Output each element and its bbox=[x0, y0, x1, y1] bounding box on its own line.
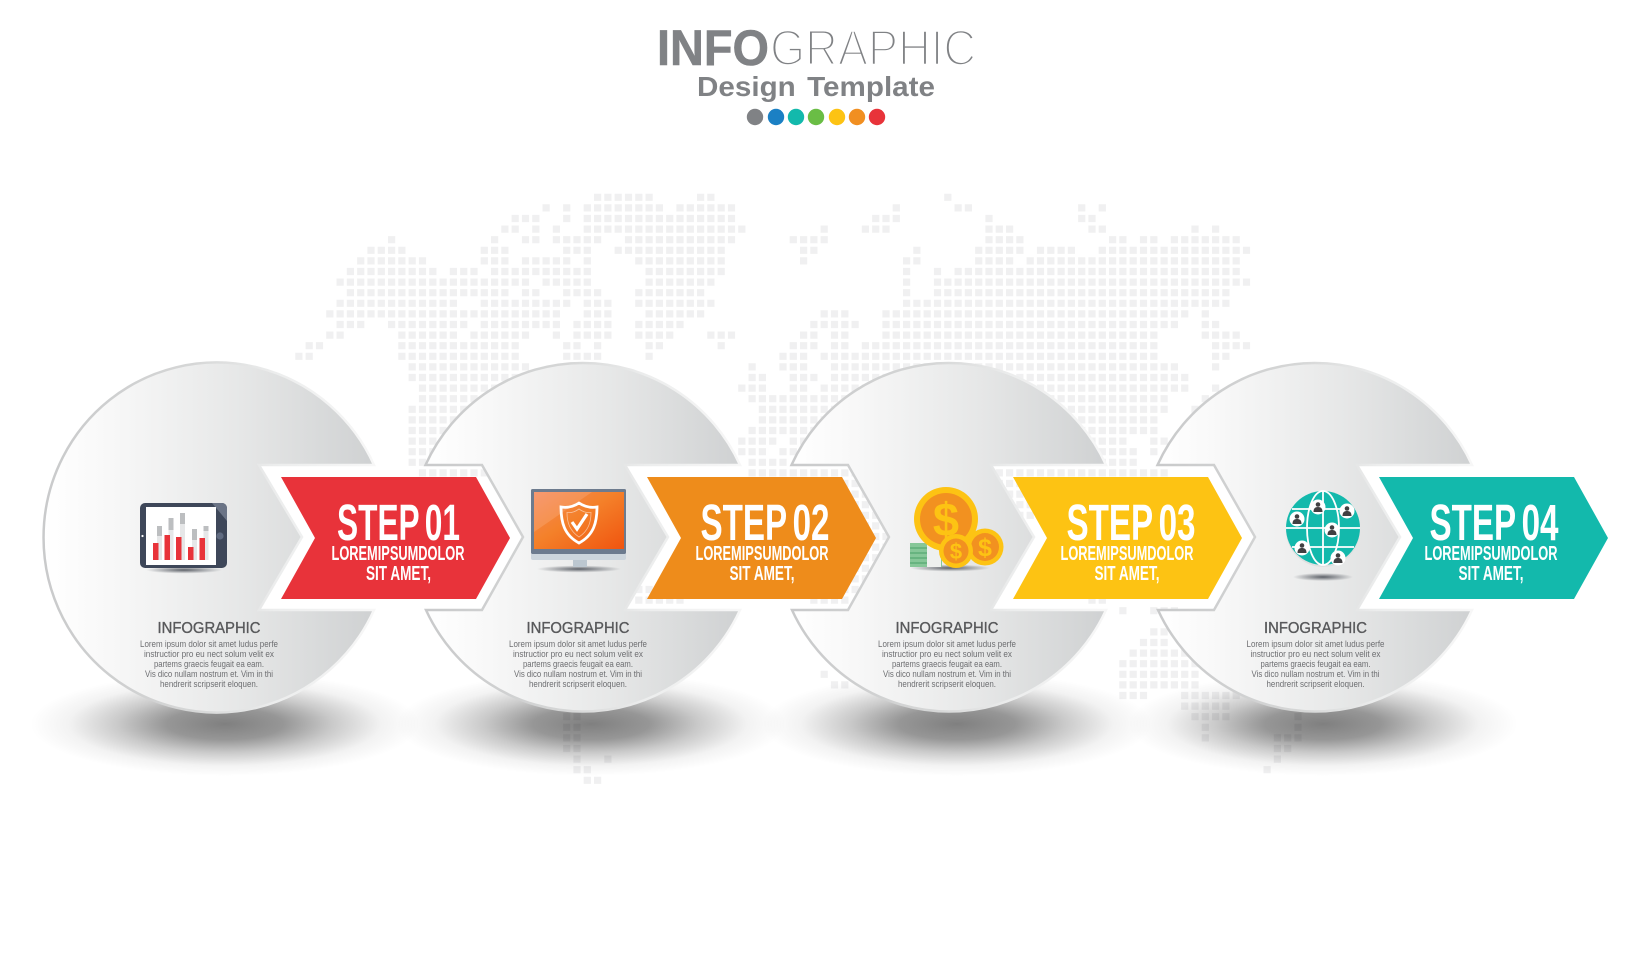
description 03: hendrerit scripserit eloquen. bbox=[898, 679, 996, 689]
description 02 bbox=[509, 620, 647, 689]
arrow: step 03: STEP 03 bbox=[1066, 494, 1196, 551]
description 01: hendrerit scripserit eloquen. bbox=[160, 679, 258, 689]
disc 03 bbox=[792, 363, 1106, 711]
dotted world map bbox=[295, 197, 1302, 780]
icon: tablet bar chart bbox=[140, 503, 227, 574]
floor shadow 03 bbox=[762, 672, 1152, 776]
description 04: INFOGRAPHIC bbox=[1264, 620, 1367, 637]
arrow: step 04 bbox=[1379, 477, 1608, 599]
description 04: instructior pro eu nect solum velit ex bbox=[1250, 649, 1381, 659]
description 03 bbox=[878, 620, 1016, 689]
description 01: instructior pro eu nect solum velit ex bbox=[144, 649, 274, 659]
description 03: instructior pro eu nect solum velit ex bbox=[882, 649, 1012, 659]
arrow: step 01: LOREMIPSUMDOLOR bbox=[332, 543, 465, 565]
arrow: step 04: SIT AMET, bbox=[1458, 563, 1524, 585]
arrow: step 04: STEP 04 bbox=[1430, 494, 1559, 551]
description 01 bbox=[140, 620, 278, 689]
icon: gold coins and cash: $ bbox=[978, 534, 992, 562]
floor shadow 01 bbox=[30, 672, 420, 776]
panel: step 02 bbox=[396, 363, 876, 776]
description 04: Lorem ipsum dolor sit amet ludus perfe bbox=[1246, 639, 1384, 649]
description 04 bbox=[1246, 620, 1384, 689]
arrow: step 01: SIT AMET, bbox=[366, 563, 431, 585]
description 02: instructior pro eu nect solum velit ex bbox=[513, 649, 643, 659]
description 04: Vis dico nullam nostrum et. Vim in thi bbox=[1252, 669, 1380, 679]
panel: step 03 bbox=[762, 363, 1242, 776]
arrow: step 02: SIT AMET, bbox=[730, 563, 794, 585]
floor shadow 02 bbox=[396, 672, 786, 776]
floor shadow 04 bbox=[1128, 672, 1518, 776]
description 02: partems graecis feugait ea eam. bbox=[523, 659, 633, 669]
icon: gold coins and cash: $ bbox=[950, 539, 962, 564]
arrow: step 01: STEP 01 bbox=[337, 494, 460, 551]
arrow: step 02: LOREMIPSUMDOLOR bbox=[696, 543, 829, 565]
icon: monitor with shield bbox=[531, 489, 626, 572]
arrow: step 02 bbox=[647, 477, 876, 599]
description 03: INFOGRAPHIC bbox=[896, 620, 998, 637]
panel: step 01 bbox=[30, 362, 510, 776]
description 04: partems graecis feugait ea eam. bbox=[1260, 659, 1370, 669]
description 01: partems graecis feugait ea eam. bbox=[154, 659, 264, 669]
disc 02 bbox=[426, 363, 740, 711]
arrow: step 02: STEP 02 bbox=[700, 494, 830, 551]
subtitle: Design Template bbox=[697, 71, 935, 102]
description 03: partems graecis feugait ea eam. bbox=[892, 659, 1002, 669]
title word: INFOGRAPHIC: INFO bbox=[657, 20, 769, 76]
panel: step 04 bbox=[1128, 363, 1608, 776]
colour dots bbox=[747, 109, 885, 125]
disc 04 bbox=[1158, 363, 1472, 711]
description 03: Vis dico nullam nostrum et. Vim in thi bbox=[883, 669, 1011, 679]
description 02: Lorem ipsum dolor sit amet ludus perfe bbox=[509, 639, 647, 649]
description 04: hendrerit scripserit eloquen. bbox=[1266, 679, 1364, 689]
title word: INFOGRAPHIC bbox=[657, 20, 976, 76]
description 01: Lorem ipsum dolor sit amet ludus perfe bbox=[140, 639, 278, 649]
icon: gold coins and cash: $ bbox=[933, 493, 959, 546]
icon: globe with people bbox=[1286, 491, 1360, 581]
description 02: Vis dico nullam nostrum et. Vim in thi bbox=[514, 669, 642, 679]
arrow: step 03: SIT AMET, bbox=[1094, 563, 1160, 585]
icon: gold coins and cash bbox=[910, 487, 1004, 572]
description 01: Vis dico nullam nostrum et. Vim in thi bbox=[145, 669, 273, 679]
title bbox=[657, 20, 976, 125]
description 03: Lorem ipsum dolor sit amet ludus perfe bbox=[878, 639, 1016, 649]
description 01: INFOGRAPHIC bbox=[158, 620, 260, 637]
description 02: hendrerit scripserit eloquen. bbox=[529, 679, 627, 689]
title word: INFOGRAPHIC: GRAPHIC bbox=[770, 20, 976, 76]
arrow: step 01 bbox=[281, 477, 510, 599]
arrow: step 03 bbox=[1013, 477, 1242, 599]
description 02: INFOGRAPHIC bbox=[526, 620, 630, 637]
arrow: step 03: LOREMIPSUMDOLOR bbox=[1060, 543, 1194, 565]
arrow: step 04: LOREMIPSUMDOLOR bbox=[1424, 543, 1558, 565]
disc 01 bbox=[44, 362, 374, 712]
